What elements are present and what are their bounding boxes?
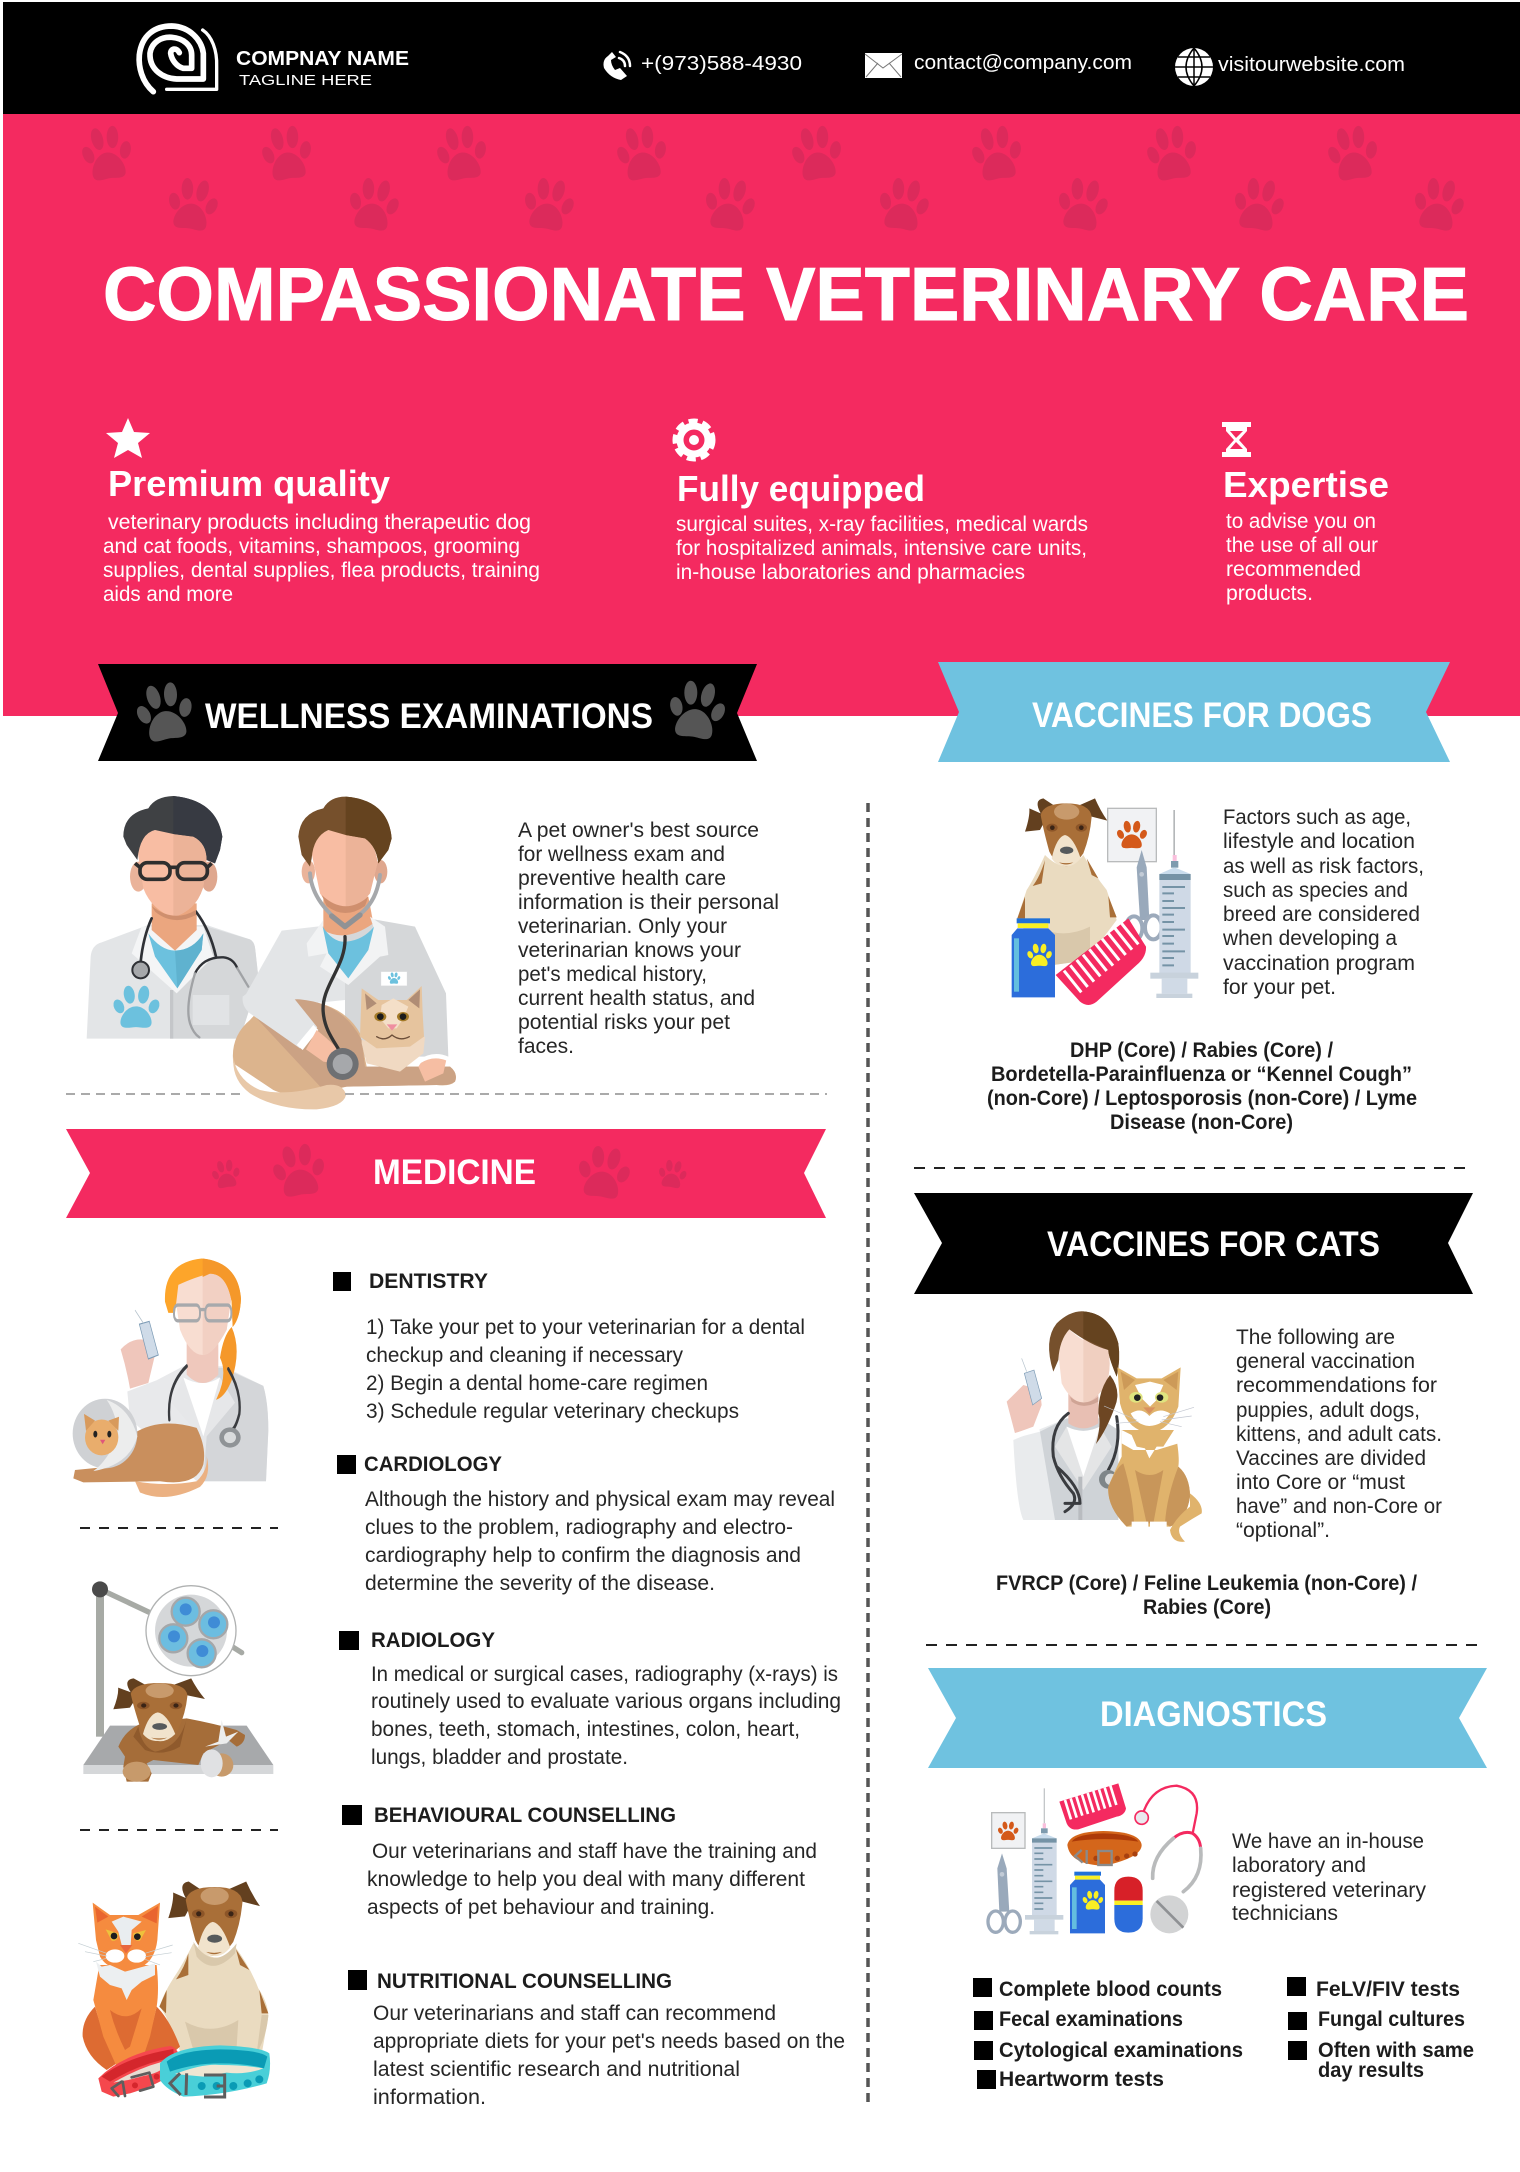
list: diagnostics tests right: Often with same: [1318, 2039, 1474, 2062]
header bar: [3, 2, 1520, 114]
feature heading: Expertise: [1223, 464, 1389, 505]
list: diagnostics tests right: Fungal cultures: [1318, 2008, 1465, 2031]
item: radiology: bones, teeth, stomach, intestines, colon, heart,: [371, 1718, 800, 1741]
icon: hourglass: [1222, 422, 1251, 457]
item: nutritional counselling: NUTRITIONAL COUNSELLING: [377, 1970, 672, 1993]
list: diagnostics tests right: FeLV/FIV tests: [1316, 1978, 1460, 2001]
feature text: [1226, 510, 1378, 605]
text: diagnostics description: technicians: [1232, 1902, 1338, 1925]
text: vaccines for dogs description: such as species and: [1223, 879, 1408, 902]
text: dog vaccines list: Disease (non-Core): [1110, 1111, 1293, 1134]
text: wellness description: A pet owner's best source: [518, 819, 759, 842]
vet with stethoscope: [243, 797, 448, 1057]
text: vaccines for dogs description: Factors such as age,: [1223, 806, 1411, 829]
item: radiology: routinely used to evaluate various organs including: [371, 1690, 841, 1713]
title: COMPASSIONATE VETERINARY CARE: [103, 252, 1469, 336]
feature text: surgical suites, x-ray facilities, medical wards: [676, 513, 1088, 536]
item: nutritional counselling: [348, 1970, 845, 2109]
hero panel: [3, 114, 1520, 716]
item: dentistry: 2) Begin a dental home-care regimen: [366, 1372, 708, 1395]
list: diagnostics tests left: Cytological examinations: [999, 2039, 1243, 2062]
vet with glasses: [87, 796, 259, 1039]
icon: paw right: [663, 677, 731, 742]
illustration: medical supplies: [988, 1783, 1201, 1934]
illustration: two vets with cat: [87, 796, 456, 1109]
illustration: vet with orange cat: [1007, 1311, 1202, 1542]
text: vaccines for cats description: “optional”.: [1236, 1519, 1330, 1542]
text: cat vaccines list: Rabies (Core): [1143, 1596, 1271, 1619]
text: vaccines for cats description: recommendations for: [1236, 1374, 1437, 1397]
item: nutritional counselling: Our veterinarians and staff can recommend: [373, 2002, 776, 2025]
text: wellness description: [518, 819, 779, 1058]
text: vaccines for cats description: into Core or “must: [1236, 1471, 1405, 1494]
dog: [159, 1881, 268, 2063]
item: cardiology: determine the severity of the disease.: [365, 1572, 715, 1595]
email: contact@company.com: [914, 52, 1132, 74]
feature text: recommended: [1226, 558, 1361, 581]
ribbon heading: WELLNESS EXAMINATIONS: [205, 697, 653, 736]
ribbon: vaccines for cats: [914, 1193, 1473, 1294]
icon: globe: [1175, 48, 1213, 86]
feature: premium quality: [103, 418, 540, 606]
cat being examined: [233, 937, 456, 1109]
text: dog vaccines list: DHP (Core) / Rabies (Core) /: [1070, 1039, 1333, 1062]
text: vaccines for dogs description: lifestyle and location: [1223, 830, 1415, 853]
red collar: [98, 2046, 180, 2097]
text: wellness description: pet's medical history,: [518, 963, 707, 986]
icon: phone: [604, 52, 630, 80]
icon: paw left: [130, 678, 199, 744]
text: vaccines for cats description: Vaccines are divided: [1236, 1447, 1426, 1470]
text: vaccines for cats description: have” and non-Core or: [1236, 1495, 1442, 1518]
text: wellness description: current health status, and: [518, 987, 755, 1010]
item: cardiology: Although the history and physical exam may reveal: [365, 1488, 835, 1511]
text: vaccines for dogs description: as well as risk factors,: [1223, 855, 1424, 878]
ribbon: diagnostics: DIAGNOSTICS: [1100, 1695, 1327, 1734]
text: diagnostics description: [1232, 1830, 1427, 1925]
text: cat vaccines list: [996, 1572, 1417, 1619]
feature text: veterinary products including therapeutic dog: [108, 511, 531, 534]
feature: expertise: [1222, 422, 1389, 605]
ribbon: vaccines for dogs: VACCINES FOR DOGS: [1032, 696, 1372, 735]
icon: mail: [865, 53, 902, 78]
feature: fully equipped: [675, 421, 1088, 584]
list: diagnostics tests left: Heartworm tests: [999, 2068, 1164, 2091]
text: vaccines for dogs description: vaccination program: [1223, 952, 1415, 975]
illustration: injured dog under lamp: [83, 1581, 273, 1782]
logo mark: [139, 26, 217, 92]
paws: [209, 1140, 689, 1201]
item: behavioural counselling: BEHAVIOURAL COUNSELLING: [374, 1804, 676, 1827]
item: cardiology: clues to the problem, radiography and electro-: [365, 1516, 793, 1539]
text: dog vaccines list: (non-Core) / Leptosporosis (non-Core) / Lyme: [987, 1087, 1417, 1110]
list: diagnostics tests left: Complete blood counts: [999, 1978, 1222, 2001]
feature text: [676, 513, 1088, 584]
item: cardiology: cardiography help to confirm the diagnosis and: [365, 1544, 801, 1567]
item: radiology: RADIOLOGY: [371, 1629, 495, 1652]
text: vaccines for dogs description: [1222, 806, 1424, 999]
text: diagnostics description: We have an in-house: [1232, 1830, 1424, 1853]
item: nutritional counselling: information.: [373, 2086, 486, 2109]
item: behavioural counselling: [342, 1804, 817, 1919]
ribbon: diagnostics: [928, 1668, 1487, 1768]
teal collar: [160, 2045, 270, 2097]
text: wellness description: preventive health care: [518, 867, 726, 890]
item: behavioural counselling: knowledge to help you deal with many different: [367, 1868, 805, 1891]
icon: gear: [675, 421, 713, 459]
illustration: vet with cat in cone: [73, 1259, 268, 1497]
text: wellness description: veterinarian. Only your: [518, 915, 727, 938]
text: vaccines for dogs description: when developing a: [1222, 927, 1397, 950]
feature text: to advise you on: [1226, 510, 1376, 533]
text: vaccines for cats description: puppies, adult dogs,: [1236, 1399, 1420, 1422]
ribbon heading: MEDICINE: [373, 1153, 536, 1192]
paw pattern: [77, 122, 1469, 233]
item: dentistry: 1) Take your pet to your veterinarian for a dental: [366, 1316, 805, 1339]
list: diagnostics tests right: [1287, 1977, 1474, 2082]
text: vaccines for cats description: [1236, 1326, 1442, 1542]
illustration: cat and dog with collars: [78, 1881, 270, 2097]
text: wellness description: veterinarian knows your: [518, 939, 741, 962]
ribbon: wellness examinations: [98, 664, 757, 761]
item: nutritional counselling: latest scientific research and nutritional: [373, 2058, 740, 2081]
feature heading: Fully equipped: [677, 468, 925, 509]
list: diagnostics tests left: [973, 1978, 1243, 2091]
item: cardiology: [337, 1453, 835, 1595]
text: dog vaccines list: Bordetella-Parainfluenza or “Kennel Cough”: [991, 1063, 1412, 1086]
text: vaccines for cats description: general vaccination: [1236, 1350, 1415, 1373]
item: radiology: lungs, bladder and prostate.: [371, 1746, 628, 1769]
text: diagnostics description: registered veterinary: [1232, 1879, 1427, 1902]
text: wellness description: faces.: [518, 1035, 574, 1058]
feature text: [103, 511, 540, 606]
cat: [78, 1903, 180, 2070]
item: cardiology: CARDIOLOGY: [364, 1453, 502, 1476]
ribbon: medicine: [66, 1129, 826, 1218]
feature text: and cat foods, vitamins, shampoos, grooming: [103, 535, 520, 558]
illustration: dog with grooming supplies: [1012, 798, 1198, 1005]
company name: COMPNAY NAME: [236, 48, 409, 70]
item: behavioural counselling: Our veterinarians and staff have the training and: [372, 1840, 817, 1863]
feature text: in-house laboratories and pharmacies: [676, 561, 1025, 584]
text: vaccines for dogs description: for your pet.: [1223, 976, 1336, 999]
list: diagnostics tests left: Fecal examinations: [999, 2008, 1183, 2031]
phone number: +(973)588-4930: [641, 53, 802, 75]
feature text: products.: [1226, 582, 1313, 605]
item: nutritional counselling: appropriate diets for your pet's needs based on the: [373, 2030, 845, 2053]
company name: [236, 48, 409, 89]
item: dentistry: 3) Schedule regular veterinary checkups: [366, 1400, 739, 1423]
website: visitourwebsite.com: [1218, 54, 1405, 76]
item: dentistry: checkup and cleaning if necessary: [366, 1344, 683, 1367]
feature text: aids and more: [103, 583, 233, 606]
text: wellness description: for wellness exam and: [518, 843, 725, 866]
item: radiology: [339, 1629, 841, 1769]
list: medicine items: [333, 1270, 845, 2109]
feature text: supplies, dental supplies, flea products, training: [103, 559, 540, 582]
feature text: for hospitalized animals, intensive care units,: [676, 537, 1087, 560]
icon: star: [106, 418, 150, 458]
text: wellness description: potential risks your pet: [518, 1011, 730, 1034]
text: dog vaccines list: [987, 1039, 1417, 1134]
text: cat vaccines list: FVRCP (Core) / Feline Leukemia (non-Core) /: [996, 1572, 1417, 1595]
item: dentistry: DENTISTRY: [369, 1270, 488, 1293]
item: dentistry: [333, 1270, 805, 1423]
feature heading: Premium quality: [108, 463, 390, 504]
text: vaccines for dogs description: breed are considered: [1223, 903, 1420, 926]
company name: TAGLINE HERE: [239, 72, 372, 89]
text: diagnostics description: laboratory and: [1232, 1854, 1366, 1877]
list: diagnostics tests right: day results: [1318, 2059, 1424, 2082]
feature text: the use of all our: [1226, 534, 1378, 557]
ribbon: vaccines for dogs: [938, 662, 1450, 762]
item: behavioural counselling: aspects of pet behaviour and training.: [367, 1896, 715, 1919]
text: vaccines for cats description: kittens, and adult cats.: [1236, 1423, 1442, 1446]
text: vaccines for cats description: The following are: [1236, 1326, 1395, 1349]
text: wellness description: information is their personal: [518, 891, 779, 914]
ribbon: vaccines for cats: VACCINES FOR CATS: [1047, 1225, 1380, 1264]
item: radiology: In medical or surgical cases, radiography (x-rays) is: [371, 1663, 838, 1686]
